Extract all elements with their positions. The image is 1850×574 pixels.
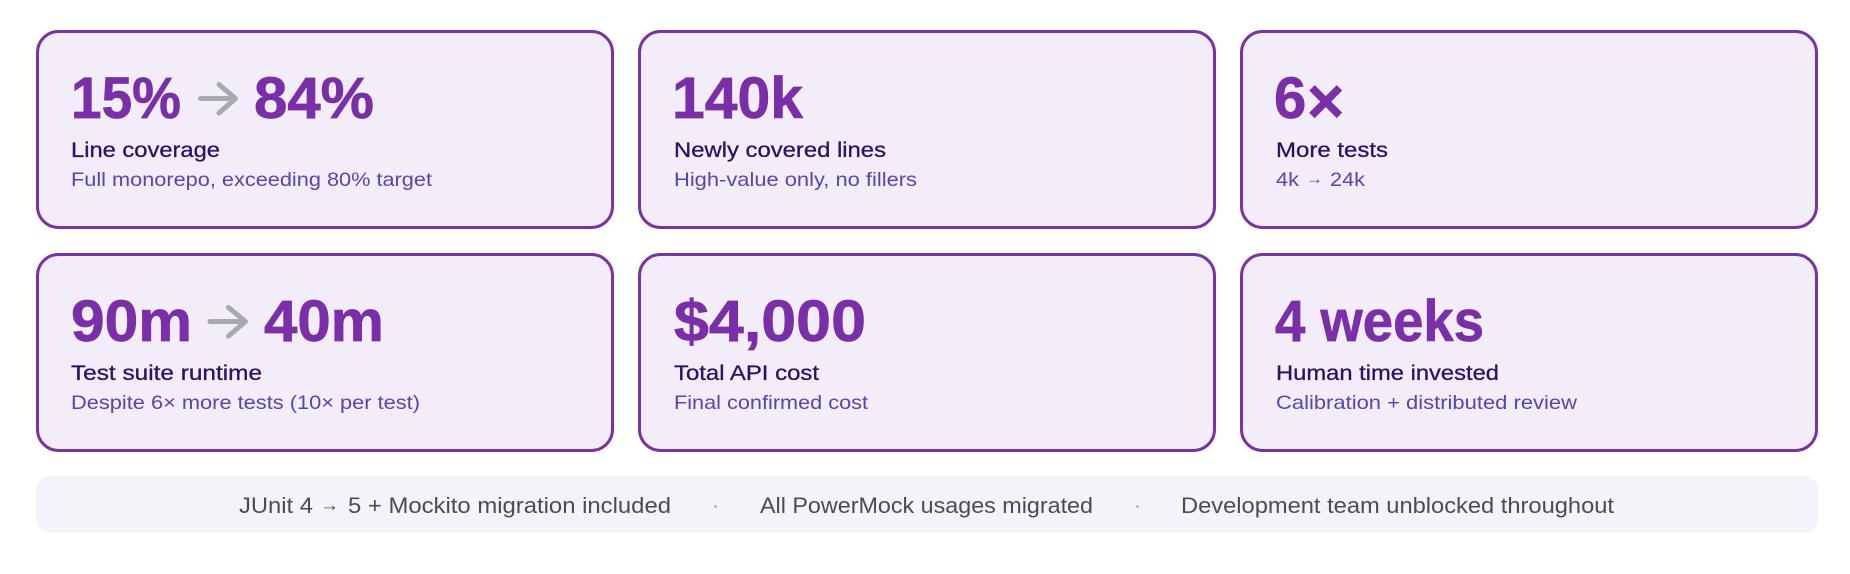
- icon: arrow: [210, 308, 246, 336]
- summary item: JUnit migration: 5 + Mockito migration included: [348, 493, 671, 518]
- separator dot: [714, 505, 717, 508]
- panel: total API cost: [640, 254, 1214, 450]
- panel: more tests: [1242, 32, 1816, 228]
- note: line coverage: Full monorepo, exceeding 80% target: [71, 169, 433, 191]
- panel: newly covered lines: [640, 32, 1214, 228]
- summary item: JUnit migration: JUnit 4: [239, 493, 313, 518]
- separator dot: [1136, 505, 1139, 508]
- note: human time invested: Calibration + distributed review: [1276, 392, 1578, 414]
- label: newly covered lines: Newly covered lines: [674, 138, 886, 162]
- summary item: development team: Development team unblocked throughout: [1181, 493, 1614, 518]
- label: total API cost: Total API cost: [674, 361, 819, 385]
- note: test suite runtime: Despite 6× more tests (10× per test): [71, 392, 420, 414]
- label: human time invested: Human time invested: [1276, 361, 1499, 385]
- metric: 6x: ×: [1307, 65, 1344, 137]
- note: more tests: 4k: [1276, 169, 1299, 191]
- note: total API cost: Final confirmed cost: [674, 392, 869, 414]
- note: newly covered lines: High-value only, no fillers: [674, 169, 917, 191]
- metric: 90m to 40m: 40m: [264, 289, 384, 354]
- metric: 15% to 84%: 15%: [71, 66, 181, 131]
- summary item: PowerMock: All PowerMock usages migrated: [760, 493, 1093, 518]
- panel: test suite runtime: [38, 254, 612, 450]
- metric: $4,000: $4,000: [674, 289, 866, 354]
- note: more tests: →: [1306, 169, 1323, 188]
- summary item: JUnit migration: →: [320, 495, 339, 516]
- metric: 4 weeks: 4 weeks: [1275, 289, 1484, 354]
- metric: 15% to 84%: [71, 66, 374, 131]
- note: more tests: 24k: [1330, 169, 1365, 191]
- label: test suite runtime: Test suite runtime: [71, 361, 262, 385]
- summary bar: [36, 476, 1818, 533]
- metric: 6x: 6: [1274, 66, 1306, 131]
- metric: 15% to 84%: 84%: [254, 66, 374, 131]
- panel: human time invested: [1242, 254, 1816, 450]
- label: line coverage: Line coverage: [71, 138, 220, 162]
- metric: 90m to 40m: 90m: [71, 289, 192, 354]
- icon: arrow: [200, 84, 236, 113]
- metric: 140k: 140k: [672, 66, 804, 131]
- label: more tests: More tests: [1276, 138, 1388, 162]
- metric: 90m to 40m: [71, 289, 384, 354]
- panel: line coverage: [38, 32, 612, 228]
